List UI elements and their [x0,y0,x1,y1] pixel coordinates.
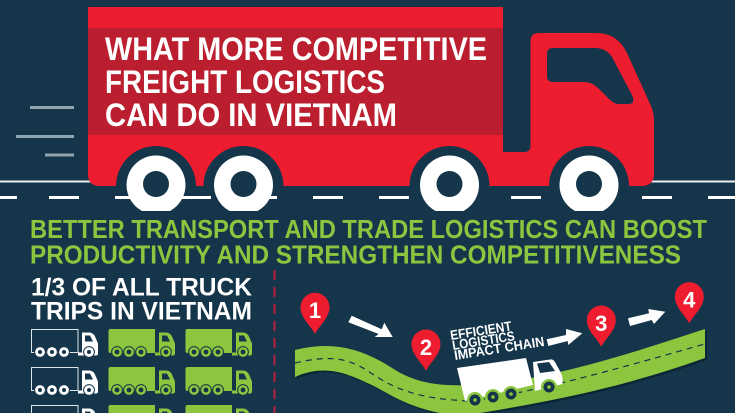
pin 3 [587,306,616,347]
road [0,180,735,199]
pin 1: 1 [309,298,321,323]
title: FREIGHT LOGISTICS [105,64,385,100]
large red truck [88,7,654,214]
cab window [547,48,633,104]
pin 4 [675,282,704,323]
impact chain label [449,318,545,363]
title: WHAT MORE COMPETITIVE [105,31,487,67]
statistic heading: TRIPS IN VIETNAM [31,298,252,326]
impact chain label: LOGISTICS [451,328,516,353]
pin 4: 4 [683,288,696,312]
truck body [88,7,654,186]
subheading [30,214,707,270]
impact chain road [295,329,707,413]
title: CAN DO IN VIETNAM [105,97,397,133]
title [105,31,487,133]
pin 2: 2 [420,335,432,360]
red dashed divider [274,270,276,413]
title band [88,28,503,135]
arrow 3 to 4 [628,309,665,326]
wheels [116,146,629,214]
arrow chain to 3 [547,329,582,346]
speed lines [16,106,74,156]
statistic heading [31,274,252,326]
arrow 1 to 2 [348,316,393,337]
small white truck on road [457,358,562,408]
pin 3: 3 [595,311,607,336]
impact chain label: IMPACT CHAIN [453,334,545,363]
subheading: PRODUCTIVITY AND STRENGTHEN COMPETITIVENESS [30,240,681,270]
statistic heading: 1/3 OF ALL TRUCK [31,274,252,302]
truck icon grid [32,329,252,413]
impact chain label: EFFICIENT [449,318,513,343]
pin 2 [412,330,440,371]
pin 1 [300,293,330,334]
